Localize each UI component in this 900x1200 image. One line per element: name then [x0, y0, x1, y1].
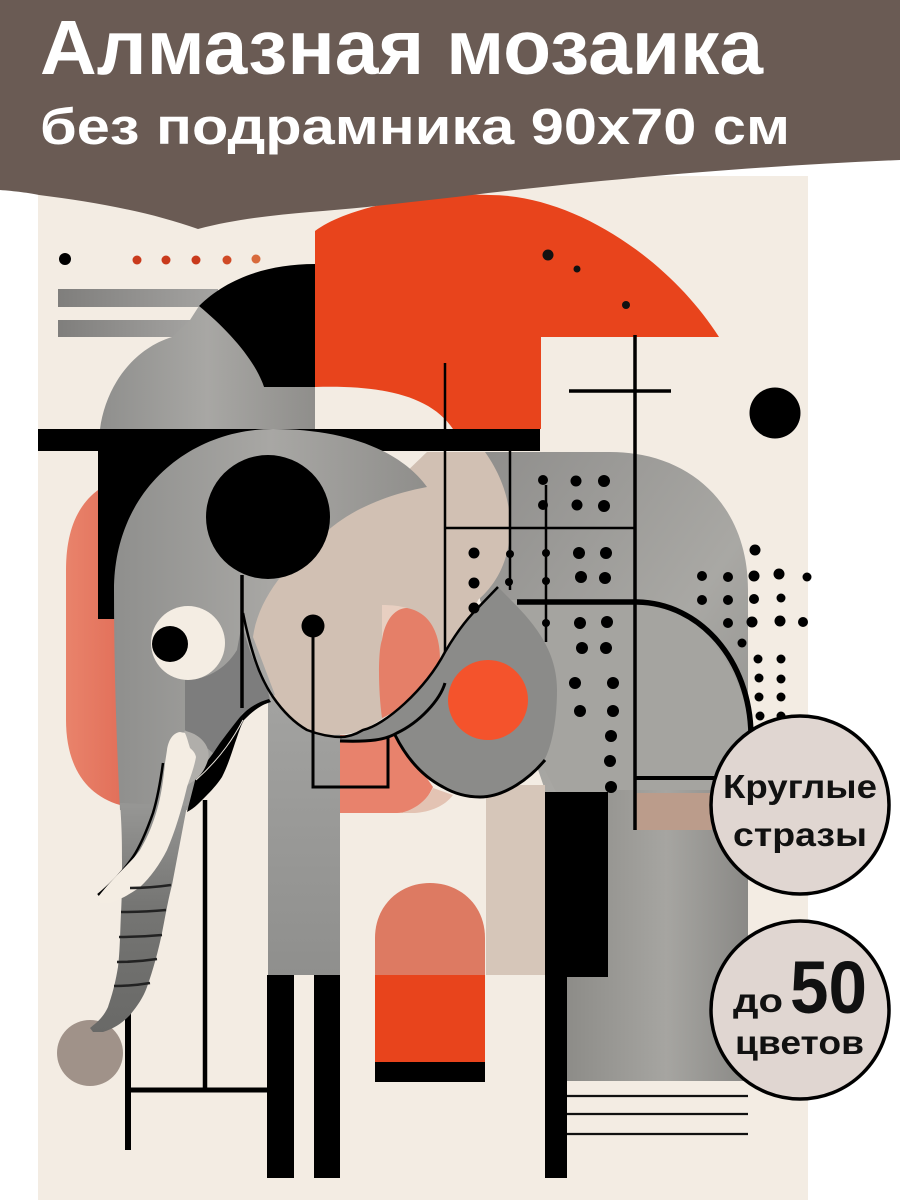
black jaw wedge [187, 699, 271, 812]
drop ear [340, 587, 557, 797]
subtitle: без подрамника 90х70 см [40, 98, 790, 155]
tusk outline [98, 763, 163, 895]
gray body [480, 452, 748, 830]
lines lower left [128, 800, 268, 1150]
black horizontal bar and block [38, 429, 540, 619]
big head circle [206, 455, 330, 579]
jaw highlight [196, 720, 243, 780]
face shade [185, 623, 270, 753]
sickle [340, 652, 445, 740]
gray bars [58, 289, 218, 337]
header band [0, 0, 900, 229]
taupe ball [57, 1020, 123, 1086]
badge: round rhinestones: стразы [733, 816, 867, 853]
dot grid [468, 475, 812, 793]
poster artwork [38, 176, 812, 1200]
big black dot [750, 388, 800, 438]
beige swatch [635, 793, 712, 830]
small dot [302, 614, 324, 638]
title: Алмазная мозаика [40, 5, 764, 91]
badge: round rhinestones: Круглые [723, 768, 877, 805]
elephant head [90, 429, 427, 1032]
black tall block [545, 792, 608, 1178]
pale sliver [382, 605, 407, 640]
badge: up to 50 colours: до [733, 982, 783, 1019]
head line [240, 575, 244, 708]
badge: up to 50 colours: 50 [790, 946, 867, 1029]
lower body panel [567, 790, 748, 1081]
eye [151, 606, 225, 680]
tusk [98, 732, 196, 903]
leg gray [268, 690, 340, 975]
badge: up to 50 colours [711, 921, 889, 1099]
lower body shade [510, 600, 750, 800]
salmon mid block [340, 735, 433, 813]
beige ear [250, 452, 510, 735]
thick black arc [517, 602, 751, 735]
black arc [199, 264, 315, 387]
red shape [315, 195, 719, 429]
badge: up to 50 colours: цветов [735, 1024, 864, 1061]
salmon arch [379, 608, 440, 718]
beige leg [486, 785, 545, 975]
gray dome [100, 306, 315, 429]
poster background [38, 176, 808, 1200]
tusk halo [180, 731, 209, 790]
top dots [59, 253, 260, 265]
salmon and red arch [375, 883, 485, 1082]
beige crescent [400, 788, 453, 813]
trunk [90, 803, 187, 1032]
ear line [243, 613, 342, 737]
trunk stripes [114, 885, 171, 986]
red circle [448, 660, 528, 740]
black legs [267, 975, 340, 1178]
red shape dots [542, 250, 630, 309]
bottom lines [567, 1096, 748, 1134]
badge: round rhinestones [711, 716, 889, 894]
grid lines [313, 335, 750, 830]
salmon rounded panel [66, 490, 120, 805]
